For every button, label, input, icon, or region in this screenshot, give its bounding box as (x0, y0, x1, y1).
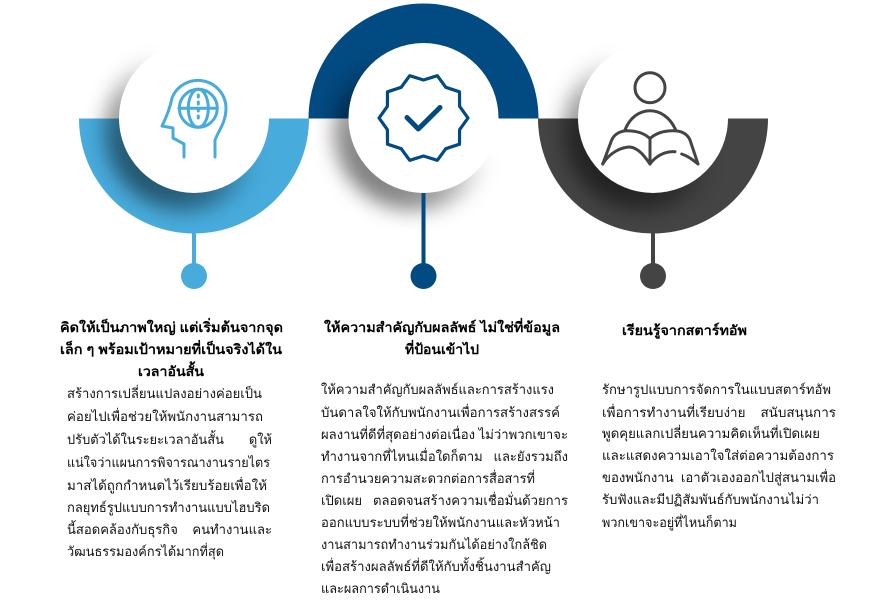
right connector stem (651, 225, 655, 270)
text block: big picture: นี้สอดคล้องกับธุรกิจ คนทำงานและ (67, 520, 272, 538)
middle half ring (308, 3, 538, 119)
text block: learn from startups: ของพนักงาน เอาตัวเองออกไปสู่สนามเพื่อ (602, 469, 836, 486)
text block: learn from startups: และแสดงความเอาใจใส่ต่อความต้องการ (602, 448, 834, 463)
right white circle (578, 43, 728, 193)
left connector dot (181, 263, 207, 289)
text block: focus on outcomes: ทำงานจากที่ไหนเมื่อใดก็ตาม และยังรวมถึง (321, 447, 568, 464)
icon: person reading book (603, 73, 698, 164)
heading: big picture (60, 317, 283, 379)
text block: big picture: ค่อยไปเพื่อช่วยให้พนักงานสามารถ (67, 408, 263, 424)
middle white circle (348, 43, 498, 193)
left connector stem (192, 225, 196, 270)
icon: badge with check mark (379, 76, 468, 160)
heading: big picture: เวลาอันสั้น (138, 361, 205, 379)
panel: learn from startups (538, 43, 836, 531)
right connector dot (640, 263, 666, 289)
text block: big picture (67, 384, 272, 560)
heading: focus on outcomes: ที่ป้อนเข้าไป (405, 339, 479, 357)
text block: focus on outcomes: ออกแบบระบบที่ช่วยให้พนักงานและหัวหน้า (321, 514, 560, 530)
text block: focus on outcomes: บันดาลใจให้กับพนักงานเพื่อการสร้างสรรค์ (321, 404, 560, 420)
text block: focus on outcomes: เพื่อสร้างผลลัพธ์ที่ดีให้กับทั้งชิ้นงานสำคัญ (321, 557, 551, 574)
icon: head with globe (162, 80, 226, 157)
right circle shadow (564, 50, 724, 210)
heading: focus on outcomes (324, 317, 560, 357)
heading: learn from startups: เรียนรู้จากสตาร์ทอัพ (622, 322, 747, 339)
text block: big picture: มาสได้ถูกกำหนดไว้เรียบร้อยเพื่อให้ (67, 477, 267, 494)
text block: learn from startups: เพื่อการทำงานที่เรียบง่าย สนับสนุนการ (602, 404, 836, 421)
text block: focus on outcomes: ผลงานที่ดีที่สุดอย่างต่อเนื่อง ไม่ว่าพวกเขาจะ (321, 426, 568, 443)
text block: focus on outcomes: งานสามารถทำงานร่วมกันได้อย่างใกล้ชิด (321, 537, 547, 552)
right half ring (538, 118, 768, 233)
text block: big picture: ปรับตัวได้ในระยะเวลาอันสั้น ดูให้ (67, 430, 272, 448)
text block: focus on outcomes: เปิดเผย ตลอดจนสร้างความเชื่อมั่นด้วยการ (321, 492, 568, 508)
panel: big picture (60, 43, 309, 560)
text block: learn from startups: พูดคุยแลกเปลี่ยนความคิดเห็นที่เปิดเผย (602, 424, 820, 442)
left white circle (119, 43, 269, 193)
text block: focus on outcomes: และผลการดำเนินงาน (321, 581, 440, 596)
heading: focus on outcomes: ให้ความสำคัญกับผลลัพธ์ ไม่ใช่ที่ข้อมูล (324, 317, 560, 336)
heading: big picture: เล็ก ๆ พร้อมเป้าหมายที่เป็นจริงได้ใน (60, 339, 283, 357)
text block: big picture: แน่ใจว่าแผนการพิจารณางานรายไตร (67, 455, 270, 470)
panel: focus on outcomes (308, 3, 568, 596)
text block: learn from startups: รักษารูปแบบการจัดการในแบบสตาร์ทอัพ (602, 382, 831, 398)
left half ring (79, 118, 309, 233)
text block: focus on outcomes: การอำนวยความสะดวกต่อการสื่อสารที่ (321, 470, 535, 486)
text block: big picture: สร้างการเปลี่ยนแปลงอย่างค่อยเป็น (67, 384, 262, 401)
text block: big picture: กลยุทธ์รูปแบบการทำงานแบบไฮบริด (67, 500, 270, 516)
heading: big picture: คิดให้เป็นภาพใหญ่ แต่เริ่มต้นจากจุด (60, 317, 283, 336)
text block: big picture: วัฒนธรรมองค์กรได้มากที่สุด (67, 543, 224, 560)
text block: learn from startups: พวกเขาจะอยู่ที่ไหนก็ตาม (602, 513, 737, 531)
middle connector dot (410, 263, 436, 289)
left circle shadow (105, 50, 265, 210)
text block: learn from startups (602, 382, 836, 531)
middle connector stem (422, 193, 426, 270)
text block: focus on outcomes: ให้ความสำคัญกับผลลัพธ์และการสร้างแรง (321, 382, 554, 397)
text block: learn from startups: รับฟังและมีปฏิสัมพันธ์กับพนักงานไม่ว่า (602, 492, 819, 507)
middle circle shadow (334, 50, 494, 210)
text block: focus on outcomes (321, 382, 568, 596)
